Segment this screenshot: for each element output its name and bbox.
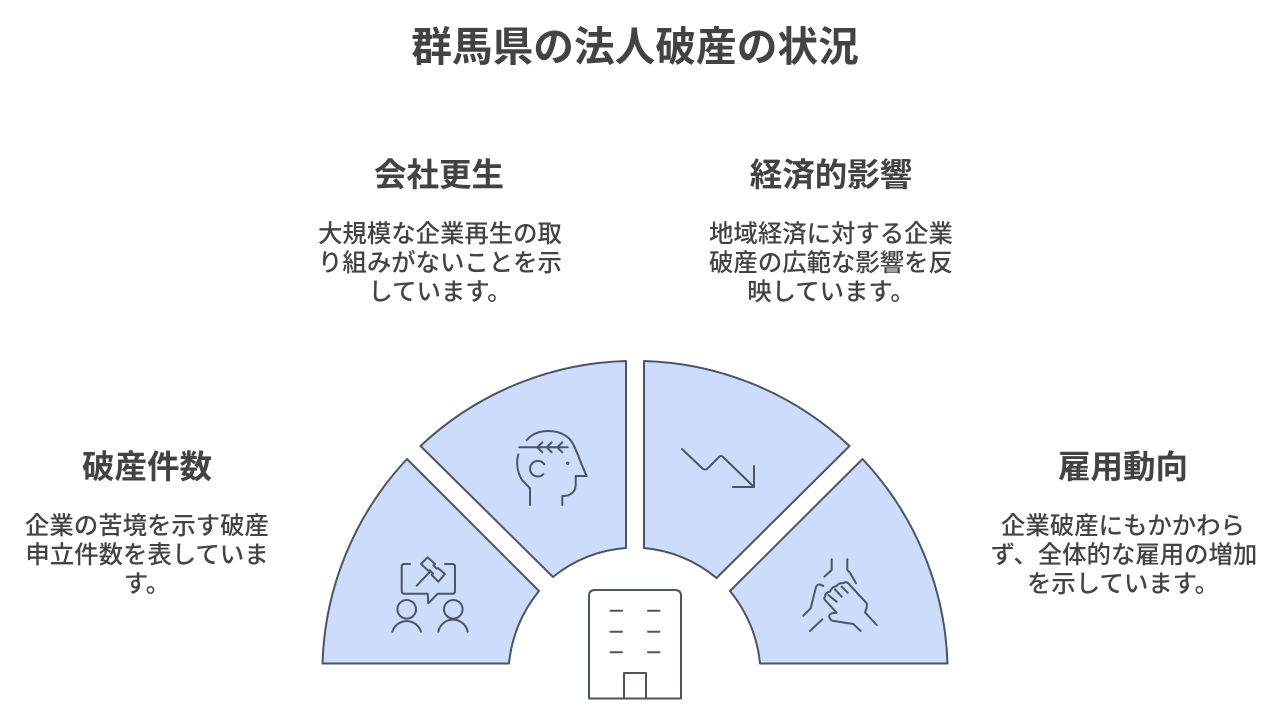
icon: gavel and two people bbox=[392, 557, 468, 632]
description: 雇用動向: 企業破産にもかかわら bbox=[1001, 513, 1245, 540]
description: 破産件数: す。 bbox=[124, 571, 170, 598]
description: 経済的影響: 地域経済に対する企業 bbox=[709, 221, 953, 248]
description: 破産件数: 企業の苦境を示す破産 bbox=[25, 513, 269, 540]
description: 破産件数: 申立件数を表していま bbox=[25, 542, 269, 569]
text block: 破産件数 bbox=[25, 449, 269, 598]
heading: 経済的影響: 経済的影響 bbox=[750, 157, 912, 193]
windows bbox=[610, 611, 660, 652]
panel: 会社更生 segment bbox=[420, 361, 626, 577]
description: 会社更生: しています。 bbox=[368, 279, 512, 306]
heading: 雇用動向: 雇用動向 bbox=[1058, 449, 1188, 485]
heading: 会社更生: 会社更生 bbox=[374, 157, 504, 193]
icon: head with arrow bbox=[517, 431, 587, 505]
text block: 会社更生 bbox=[318, 157, 562, 306]
description: 経済的影響: 破産の広範な影響を反 bbox=[709, 250, 953, 277]
door bbox=[624, 673, 646, 698]
text block: 雇用動向 bbox=[991, 449, 1257, 598]
panel: 破産件数 segment bbox=[322, 459, 539, 664]
description: 会社更生: 大規模な企業再生の取 bbox=[318, 221, 562, 248]
panel: 雇用動向 segment bbox=[730, 459, 948, 664]
description: 雇用動向: ず、全体的な雇用の増加 bbox=[991, 542, 1257, 569]
icon: declining arrow bbox=[682, 449, 754, 487]
description: 雇用動向: を示しています。 bbox=[1027, 571, 1219, 598]
heading: 破産件数: 破産件数 bbox=[82, 449, 212, 485]
panel: 経済的影響 segment bbox=[644, 361, 850, 578]
text block: 経済的影響 bbox=[709, 157, 953, 306]
description: 会社更生: り組みがないことを示 bbox=[318, 250, 562, 277]
title: 群馬県の法人破産の状況 bbox=[411, 24, 859, 70]
icon: office building bbox=[589, 590, 681, 698]
icon: hands joining bbox=[803, 559, 877, 631]
description: 経済的影響: 映しています。 bbox=[747, 279, 915, 306]
